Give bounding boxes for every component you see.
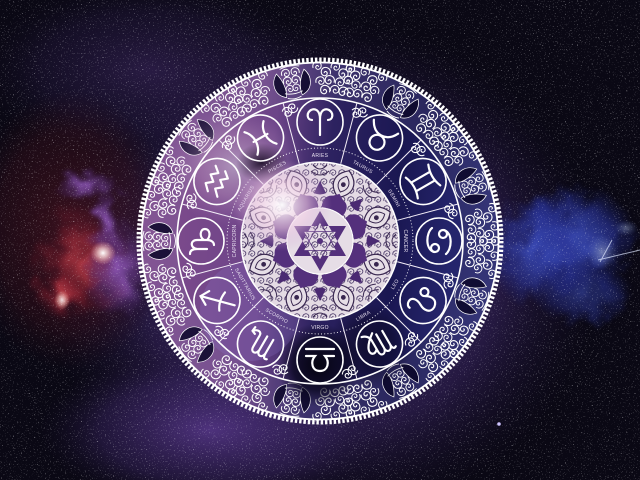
icon: Sagittarius [186, 269, 248, 332]
sign name labels: VIRGO [311, 325, 329, 331]
sign name labels: CANCER [402, 230, 408, 253]
icon: Leo [392, 269, 454, 332]
icon: Aries [297, 99, 343, 145]
mandala centre disc [287, 208, 353, 274]
sign name labels: SCORPIO [264, 307, 289, 325]
icon: Virgo [348, 313, 411, 375]
hexagram star [294, 211, 346, 271]
icon: Pisces [229, 107, 292, 169]
sign name labels: ARIES [312, 153, 329, 159]
icon: Gemini [392, 150, 454, 213]
icon: Capricorn [178, 218, 224, 264]
sign name labels: GEMINI [386, 189, 401, 208]
sign name labels: CAPRICORN [232, 225, 238, 257]
toothed rim [140, 61, 500, 421]
sign name labels: LEO [390, 278, 401, 291]
icon: Libra [297, 337, 343, 383]
icon: Scorpio [229, 313, 292, 375]
zodiac sector dividers [181, 102, 459, 380]
mandala eye motifs [244, 165, 396, 317]
nebula: bright core [54, 241, 116, 310]
ornament ring overlay [142, 54, 509, 428]
icon: Cancer [416, 218, 462, 264]
nebula: blue cloud at right [485, 184, 640, 325]
mandala highlight [232, 159, 332, 251]
icon: Aquarius [186, 150, 248, 213]
zodiac wheel [140, 54, 509, 428]
sign name labels: PISCES [267, 160, 288, 175]
sign name labels: AQUARIUS [237, 184, 256, 212]
sign name labels: SAGITTARIUS [233, 267, 256, 302]
central mandala [232, 159, 399, 320]
sign name labels: TAURUS [351, 159, 374, 176]
icon: Taurus [348, 107, 411, 169]
bright star [497, 422, 501, 426]
sign name labels: LIBRA [355, 310, 372, 323]
mandala purple petal ring [268, 189, 372, 293]
sign name labels [232, 153, 408, 331]
zodiac ring tones [165, 98, 463, 407]
